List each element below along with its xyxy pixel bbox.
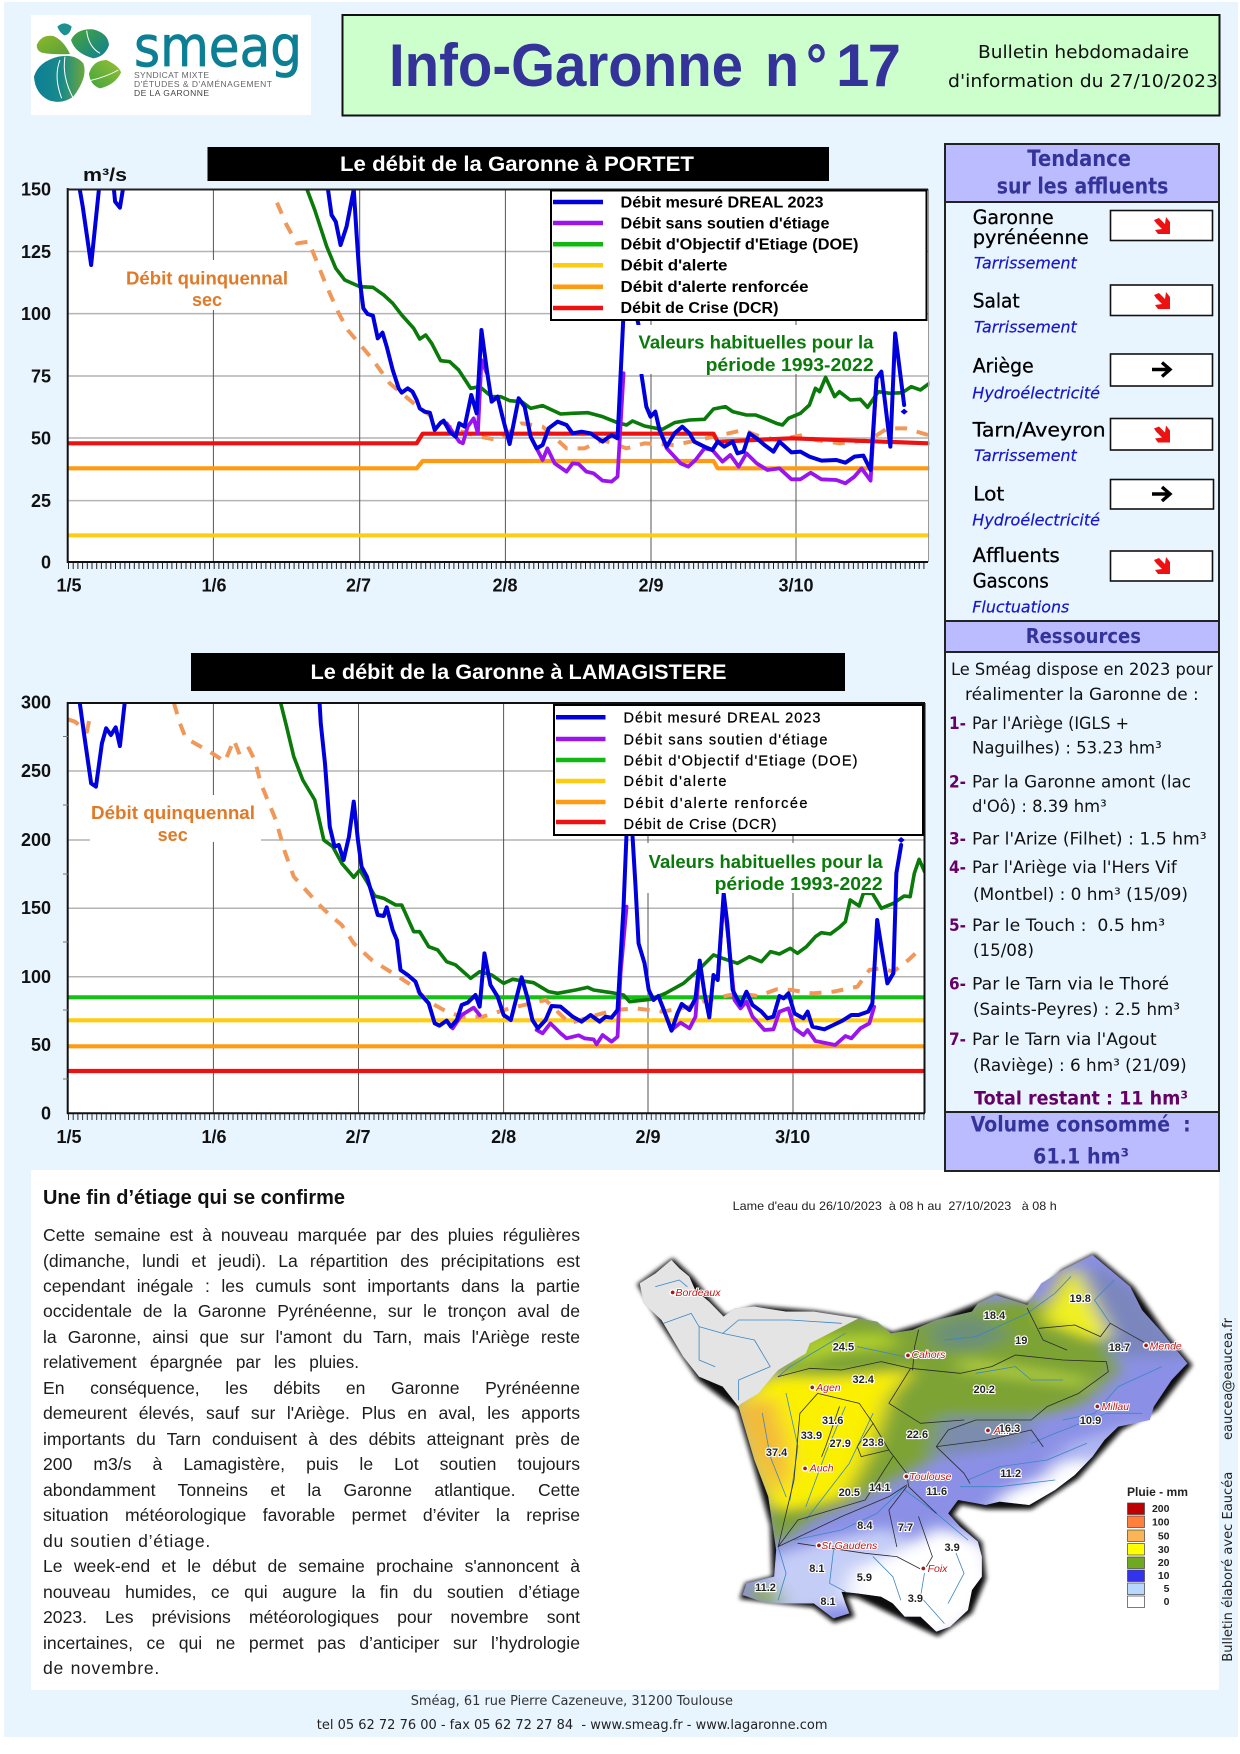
vertical credit text: eaucea@eaucea.fr <box>1220 1318 1236 1440</box>
x axis labels: Lamagistère: 1/6 <box>201 1127 227 1147</box>
map precipitation values: 19 <box>1015 1335 1027 1347</box>
x axis labels: Lamagistère: 2/9 <box>635 1127 661 1147</box>
affluent: Salat: Tarrissement <box>974 317 1077 336</box>
map: rainfall over Garonne basin <box>632 1250 1197 1643</box>
chart title: Lamagistère <box>191 653 845 691</box>
x axis labels: Lamagistère: 2/7 <box>345 1127 371 1147</box>
resource 6: (Saints-Peyres) : 2.5 hm³ <box>973 1000 1180 1020</box>
x axis labels: Lamagistère <box>56 1127 810 1147</box>
map precipitation values: 7.7 <box>898 1522 913 1534</box>
panel: volume consommé <box>945 1112 1219 1171</box>
affluent: Garonne pyrénéenne: Garonne <box>973 206 1054 229</box>
map precipitation values: 20.2 <box>973 1384 995 1396</box>
data series: Portet <box>68 189 929 535</box>
map city labels <box>670 1287 1182 1575</box>
text: incertaines, ce qui ne permet pas d’anticiper sur l’hydrologie <box>43 1632 580 1652</box>
affluent: Lot: Lot <box>973 483 1005 506</box>
y axis labels: Lamagistère: 0 <box>41 1104 51 1124</box>
text: relativement épargnée par les pluies. <box>43 1352 359 1372</box>
annotation: valeurs habituelles: Valeurs habituelles pour la <box>638 332 875 352</box>
map city labels: Millau <box>1102 1401 1129 1413</box>
footer contact <box>317 1693 828 1733</box>
y axis labels: Lamagistère: 100 <box>21 967 51 987</box>
bulletin date text: Bulletin hebdomadaire <box>978 43 1189 63</box>
map city labels: Foix <box>928 1563 948 1575</box>
resource 2 <box>949 772 1191 817</box>
logo: smeag: DE LA GARONNE <box>134 88 209 98</box>
y axis labels: Lamagistère <box>21 692 51 1124</box>
annotation: débit quinquennal sec: Débit quinquennal <box>91 803 255 823</box>
resource 5: 5- <box>949 916 966 936</box>
y axis labels: Portet: 150 <box>21 180 51 200</box>
affluent: Affluents Gascons: Fluctuations <box>972 598 1069 617</box>
resource 6 <box>949 974 1180 1020</box>
resource 2: 2- <box>949 772 966 792</box>
affluent: Salat <box>973 285 1212 336</box>
title: Info-Garonne n°17: n <box>765 32 799 99</box>
map precipitation values: 22.6 <box>907 1429 928 1441</box>
text: 200 m3/s à Lamagistère, puis le Lot soutien toujours <box>43 1454 580 1474</box>
annotation: valeurs habituelles: période 1993-2022 <box>715 874 883 894</box>
chart title: Portet: Le débit de la Garonne à PORTET <box>340 153 694 176</box>
bulletin date text <box>948 43 1218 92</box>
footer contact: Sméag, 61 rue Pierre Cazeneuve, 31200 Toulouse <box>411 1693 733 1709</box>
panel: ressources <box>945 621 1219 1110</box>
annotation: débit quinquennal sec <box>120 260 294 310</box>
legend: Portet: Débit sans soutien d'étiage <box>620 216 830 232</box>
resource 6: 6- <box>949 974 966 994</box>
y axis labels: Portet <box>21 180 51 572</box>
y axis labels: Lamagistère: 50 <box>31 1035 51 1055</box>
text: occidentale de la Garonne Pyrénéenne, sur le tronçon aval de <box>43 1301 580 1321</box>
logo: smeag: SYNDICAT MIXTE <box>134 70 209 80</box>
article text <box>43 1225 580 1678</box>
text: de novembre. <box>43 1658 160 1678</box>
map city labels: Bordeaux <box>676 1287 721 1299</box>
affluent: Tarn/Aveyron <box>972 418 1212 465</box>
legend: Lamagistère: Débit sans soutien d'étiage <box>624 732 828 748</box>
map precipitation values: 11.6 <box>926 1486 947 1498</box>
map precipitation values: 14.1 <box>869 1482 891 1494</box>
resource 2: d'Oô) : 8.39 hm³ <box>972 797 1107 817</box>
text: nouveau humides, ce qui augure la fin du soutien d’étiage <box>43 1582 580 1602</box>
map precipitation values: 8.4 <box>857 1520 873 1532</box>
heading: une fin d'étiage: Une fin d’étiage qui se confirme <box>43 1187 345 1209</box>
affluent: Tarn/Aveyron: Tarn/Aveyron <box>972 419 1106 442</box>
text: En conséquence, les débits en Garonne Pyrénéenne <box>43 1378 580 1398</box>
map title: Lame d'eau du 26/10/2023 à 08 h au 27/10/2023 à 08 h <box>733 1199 1057 1213</box>
map legend: pluie: 30 <box>1158 1544 1170 1556</box>
annotation: débit quinquennal sec: Débit quinquennal <box>126 268 288 288</box>
y axis labels: Portet: 50 <box>31 428 51 448</box>
affluent: Lot <box>972 480 1214 530</box>
map city labels: Cahors <box>911 1349 946 1361</box>
annotation: valeurs habituelles: Valeurs habituelles pour la <box>649 852 884 872</box>
resource 5: Par le Touch : 0.5 hm³ <box>972 916 1165 936</box>
title: Info-Garonne n°17: Info-Garonne <box>389 32 743 99</box>
title banner <box>342 15 1220 116</box>
bulletin date text: d'information du 27/10/2023 <box>948 72 1218 92</box>
affluent: Lot: Hydroélectricité <box>972 511 1100 530</box>
chart title: Lamagistère: Le débit de la Garonne à LAMAGISTERE <box>310 661 726 684</box>
map precipitation values <box>755 1293 1130 1608</box>
map precipitation values: 8.1 <box>820 1596 836 1608</box>
resource 1: Naguilhes) : 53.23 hm³ <box>972 738 1162 758</box>
annotation: valeurs habituelles: période 1993-2022 <box>706 355 874 375</box>
map legend: pluie: 0 <box>1164 1596 1170 1608</box>
x axis labels: Portet: 2/7 <box>346 576 371 596</box>
logo: smeag <box>31 15 311 115</box>
affluent: Salat: Salat <box>973 290 1020 313</box>
map precipitation values: 10.9 <box>1080 1415 1101 1427</box>
text: importants du Tarn conduisent à des débits atteignant près de <box>43 1429 580 1449</box>
heading: tendance: sur les affluents <box>997 174 1168 199</box>
affluent: Ariège: Ariège <box>973 355 1034 378</box>
map precipitation values: 20.5 <box>839 1487 860 1499</box>
x axis labels: Portet: 2/9 <box>638 576 664 596</box>
chart: débit à Lamagistère <box>21 653 925 1147</box>
unit label: m³/s <box>83 165 127 185</box>
resource 4: Par l'Ariège via l'Hers Vif <box>972 858 1178 878</box>
resource 2: Par la Garonne amont (lac <box>972 772 1191 792</box>
map precipitation values: 3.9 <box>908 1593 923 1605</box>
resource 4: 4- <box>949 858 966 878</box>
legend: Portet: Débit d'alerte renforcée <box>620 279 809 296</box>
legend: Portet: Débit d'Objectif d'Etiage (DOE) <box>620 236 858 254</box>
text: Cette semaine est à nouveau marquée par des pluies régulières <box>43 1225 580 1245</box>
x axis labels: Portet: 1/6 <box>201 576 227 596</box>
text: (dimanche, lundi et jeudi). La répartition des précipitations est <box>43 1250 580 1270</box>
text: abondamment Tonneins et la Garonne atlantique. Cette <box>43 1480 580 1500</box>
map city labels: Toulouse <box>909 1471 952 1483</box>
affluent: Affluents Gascons: Gascons <box>973 569 1049 592</box>
map precipitation values: 5.9 <box>857 1572 872 1584</box>
affluent: Garonne pyrénéenne: pyrénéenne <box>973 226 1089 249</box>
resource 1 <box>949 714 1162 758</box>
resource 7: 7- <box>949 1030 966 1050</box>
map precipitation values: 27.9 <box>829 1438 851 1450</box>
legend: Lamagistère: Débit d'alerte renforcée <box>624 796 808 812</box>
y axis labels: Lamagistère: 300 <box>21 692 51 712</box>
axes: Portet <box>67 188 928 566</box>
map precipitation values: 3.9 <box>944 1542 960 1554</box>
chart title: Portet <box>208 147 829 181</box>
map precipitation values: 11.2 <box>1000 1468 1021 1480</box>
annotation: débit quinquennal sec: sec <box>192 290 222 310</box>
legend: Lamagistère <box>554 705 923 835</box>
vertical credit text <box>1220 1318 1236 1662</box>
panel: tendance sur les affluents <box>945 144 1219 617</box>
footer contact: tel 05 62 72 76 00 - fax 05 62 72 27 84 - www.smeag.fr - www.lagaronne.com <box>317 1717 828 1733</box>
panel: commentary and map background <box>31 1170 1219 1690</box>
resource 3: Par l'Arize (Filhet) : 1.5 hm³ <box>972 830 1207 850</box>
map precipitation values: 11.2 <box>755 1582 776 1594</box>
y axis labels: Lamagistère: 200 <box>21 830 51 850</box>
x axis labels: Portet: 1/5 <box>56 576 82 596</box>
map precipitation values: 31.6 <box>822 1415 843 1427</box>
resource 1: Par l'Ariège (IGLS + <box>972 714 1129 734</box>
affluent: Affluents Gascons: Affluents <box>973 544 1060 567</box>
map city labels: Agen <box>815 1382 841 1394</box>
y axis labels: Lamagistère: 150 <box>21 898 51 918</box>
y axis labels: Portet: 125 <box>21 242 51 262</box>
legend: Lamagistère: Débit d'Objectif d'Etiage (DOE) <box>624 754 858 770</box>
map city labels: Mende <box>1150 1340 1182 1352</box>
resource 6: Par le Tarn via le Thoré <box>972 974 1169 994</box>
text: la Garonne, ainsi que sur l'amont du Tarn, mais l'Ariège reste <box>43 1327 580 1347</box>
map precipitation values: 37.4 <box>766 1447 788 1459</box>
map precipitation values: 8.1 <box>809 1563 825 1575</box>
map precipitation values: 16.3 <box>999 1423 1020 1435</box>
legend: Portet: Débit de Crise (DCR) <box>620 300 778 317</box>
affluent: Ariège: Hydroélectricité <box>972 383 1100 402</box>
map precipitation values: 23.8 <box>862 1437 884 1449</box>
logo: smeag: smeag <box>134 15 302 80</box>
x axis labels: Portet: 2/8 <box>492 576 518 596</box>
map legend: pluie: 20 <box>1158 1557 1170 1569</box>
x axis labels: Lamagistère: 2/8 <box>491 1127 516 1147</box>
affluent: Garonne pyrénéenne: Tarrissement <box>974 253 1077 272</box>
chart: débit à Portet <box>21 147 929 596</box>
intro text: Le Sméag dispose en 2023 pour <box>951 660 1213 680</box>
title: Info-Garonne n°17: ° <box>806 32 827 99</box>
heading: tendance <box>997 147 1168 199</box>
y axis labels: Portet: 75 <box>31 366 51 386</box>
resource 3: 3- <box>949 830 966 850</box>
total restant: Total restant : 11 hm³ <box>974 1088 1188 1110</box>
x axis labels: Lamagistère: 1/5 <box>56 1127 82 1147</box>
legend: Lamagistère: Débit de Crise (DCR) <box>624 817 776 833</box>
y axis labels: Lamagistère: 250 <box>21 761 51 781</box>
panel: volume consommé: 61.1 hm³ <box>1033 1144 1129 1168</box>
text: 2023. Les prévisions météorologiques pour novembre sont <box>43 1607 580 1627</box>
affluent: Ariège <box>972 354 1212 402</box>
map precipitation values: 32.4 <box>852 1374 875 1386</box>
y axis labels: Portet: 100 <box>21 304 51 324</box>
map legend: pluie: Pluie - mm <box>1127 1487 1188 1499</box>
text: situation météorologique favorable permet d’éviter la reprise <box>43 1505 580 1525</box>
logo: smeag: D'ÉTUDES & D'AMÉNAGEMENT <box>134 79 272 89</box>
map precipitation values: 18.4 <box>984 1310 1006 1322</box>
map legend: pluie: 50 <box>1158 1530 1170 1542</box>
annotation: débit quinquennal sec <box>90 795 261 845</box>
text: demeurent élevés, sauf sur l'Ariège. Plus en aval, les apports <box>43 1403 580 1423</box>
map precipitation values: 18.7 <box>1109 1342 1130 1354</box>
affluent: Garonne pyrénéenne <box>973 206 1212 272</box>
map city labels: St-Gaudens <box>821 1540 878 1552</box>
legend: Lamagistère: Débit d'alerte <box>624 774 726 790</box>
resource 7: (Raviège) : 6 hm³ (21/09) <box>973 1056 1187 1076</box>
resource 7: Par le Tarn via l'Agout <box>972 1030 1157 1050</box>
resource 5 <box>949 916 1165 961</box>
annotation: valeurs habituelles <box>646 843 885 894</box>
legend: Portet: Débit mesuré DREAL 2023 <box>620 194 824 212</box>
map precipitation values: 19.8 <box>1069 1293 1091 1305</box>
legend: Portet <box>551 190 926 320</box>
resource 1: 1- <box>949 714 966 734</box>
panel: volume consommé: Volume consommé : <box>971 1112 1191 1136</box>
map legend: pluie <box>1127 1487 1188 1608</box>
affluent: Affluents Gascons <box>972 544 1212 617</box>
affluent: Tarn/Aveyron: Tarrissement <box>974 446 1077 465</box>
title: Info-Garonne n°17: 17 <box>836 32 901 99</box>
map precipitation values: 24.5 <box>833 1342 854 1354</box>
text: du soutien d’étiage. <box>43 1531 211 1551</box>
annotation: débit quinquennal sec: sec <box>158 825 188 845</box>
resource 5: (15/08) <box>973 941 1034 961</box>
map legend: pluie: 200 <box>1152 1503 1170 1515</box>
x axis labels: Lamagistère: 3/10 <box>775 1127 810 1147</box>
map precipitation values: 33.9 <box>801 1430 822 1442</box>
map legend: pluie: 100 <box>1152 1516 1170 1528</box>
heading: ressources: Ressources <box>1026 624 1141 648</box>
y axis labels: Portet: 25 <box>31 491 51 511</box>
y axis labels: Portet: 0 <box>41 552 51 572</box>
map city labels: Auch <box>809 1462 834 1474</box>
annotation: valeurs habituelles <box>632 325 877 375</box>
legend: Lamagistère: Débit mesuré DREAL 2023 <box>624 710 820 726</box>
text: cependant inégale : les cumuls sont importants dans la partie <box>43 1276 580 1296</box>
data series: Lamagistère <box>68 703 925 1071</box>
axes: Lamagistère <box>63 702 925 1117</box>
resource 7 <box>949 1030 1187 1076</box>
x axis labels: Portet <box>56 576 814 596</box>
intro text <box>951 660 1213 705</box>
map city labels: A... <box>993 1425 1009 1437</box>
x axis labels: Portet: 3/10 <box>778 576 814 596</box>
heading: tendance: Tendance <box>1027 147 1131 172</box>
map legend: pluie: 5 <box>1164 1583 1170 1595</box>
text: Le week-end et le début de semaine prochaine s'annoncent à <box>43 1556 580 1576</box>
resource 4 <box>949 858 1188 905</box>
legend: Portet: Débit d'alerte <box>620 258 728 274</box>
map legend: pluie: 10 <box>1158 1570 1170 1582</box>
resource 4: (Montbel) : 0 hm³ (15/09) <box>973 885 1188 905</box>
intro text: réalimenter la Garonne de : <box>965 685 1199 705</box>
vertical credit text: Bulletin élaboré avec Eaucéa <box>1220 1472 1236 1662</box>
